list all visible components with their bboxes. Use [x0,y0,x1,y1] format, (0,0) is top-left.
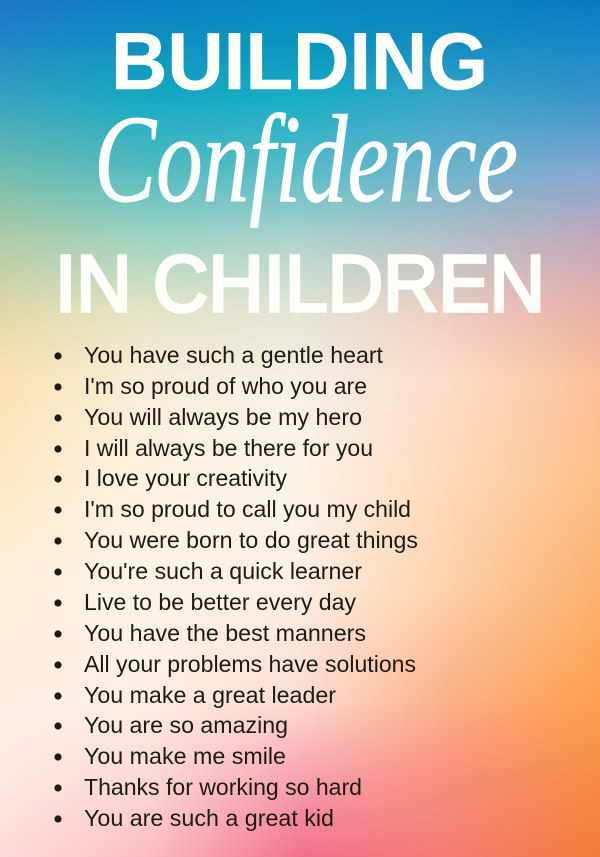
affirmations list [54,342,418,831]
title line: IN CHILDREN: IN CHILDREN [55,239,545,328]
list item 8: You're such a quick learner [84,558,362,584]
list item 14: You make me smile [84,743,286,769]
list item 11: All your problems have solutions [84,651,416,677]
list item 6: I'm so proud to call you my child [84,496,411,522]
list item 2: I'm so proud of who you are [84,373,367,399]
list item 3: You will always be my hero [84,404,362,430]
title line: BUILDING: BUILDING [111,17,488,107]
list item 7: You were born to do great things [84,527,418,553]
list item 12: You make a great leader [84,682,336,708]
list item 9: Live to be better every day [84,589,356,615]
list item 16: You are such a great kid [84,805,334,831]
list item 15: Thanks for working so hard [84,774,362,800]
list item 10: You have the best manners [84,620,366,646]
title [55,17,545,328]
list item 4: I will always be there for you [84,435,373,461]
list item 5: I love your creativity [84,465,287,491]
list item 13: You are so amazing [84,712,288,738]
list item 1: You have such a gentle heart [84,342,383,368]
